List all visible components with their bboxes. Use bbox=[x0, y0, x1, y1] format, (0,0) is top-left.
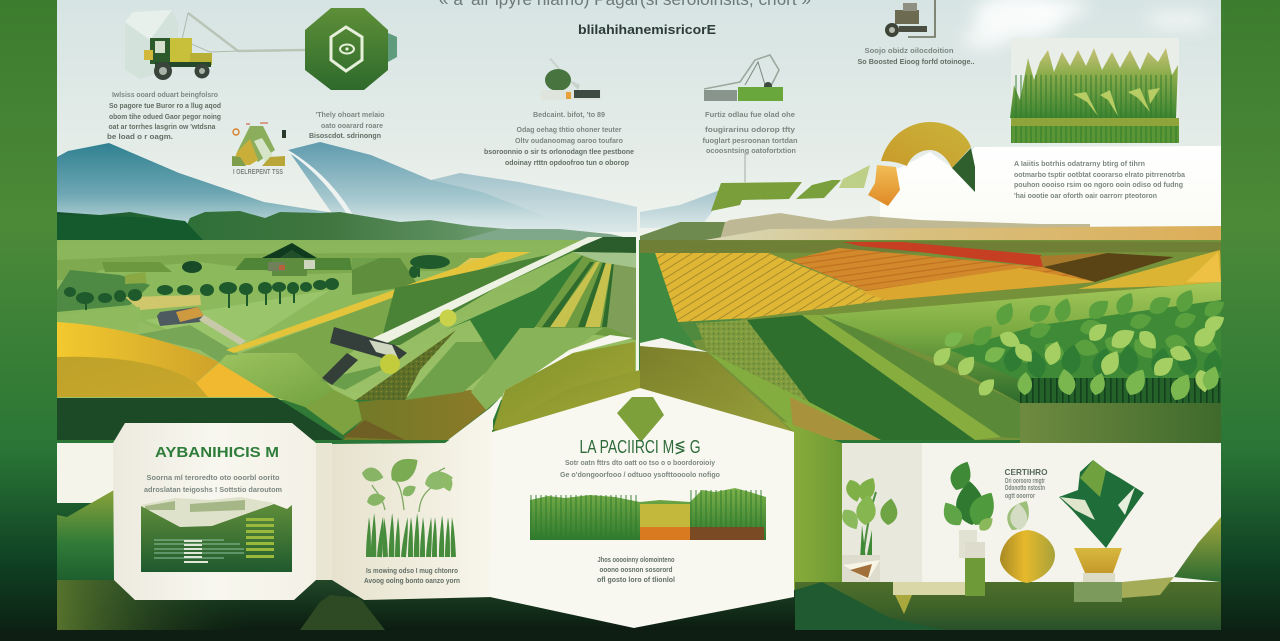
white seed beam bbox=[369, 237, 603, 346]
subtitle: blilahihanemisricorE bbox=[578, 22, 716, 37]
text: centre lines: Sotr oatn fttrs dto oatt oo tso o o boordoroioiy bbox=[565, 458, 716, 467]
clouds bbox=[963, 0, 1210, 49]
text: centre caption: ofl gosto loro of tlionlol bbox=[597, 575, 675, 584]
text: plant shelf label bbox=[1004, 467, 1048, 500]
panel: right landscape fields bbox=[640, 240, 1221, 443]
text: card 2 caption: Is mowing odso I mug chtonro bbox=[366, 566, 458, 575]
panel: card 2 plants bbox=[316, 420, 492, 600]
panel: olive fold and centre divider bbox=[493, 237, 794, 432]
text block: centre bbox=[484, 110, 634, 167]
heading: centre: LA PACIIRCI M≶ G bbox=[580, 437, 700, 457]
chart: crop soil strip bbox=[530, 488, 766, 540]
text: plant shelf label: CERTIHRO bbox=[1004, 467, 1048, 477]
text: centre lines bbox=[560, 458, 720, 479]
icon: small harvester bbox=[157, 307, 246, 345]
panel: left landscape bbox=[57, 237, 637, 400]
distant tree line bbox=[57, 211, 1221, 242]
text: plant shelf label: ogtt ooorror bbox=[1005, 491, 1035, 500]
text: card 2 caption: Avoog oolng bonto oanzo yorn bbox=[364, 576, 460, 585]
illustration: leafy plant on column bbox=[938, 458, 1002, 596]
icon: farmhouse bbox=[262, 243, 317, 276]
icon: harvester truck with boom bbox=[125, 10, 305, 80]
text: centre caption: ooono oosnon sosorord bbox=[600, 565, 673, 574]
text: card 2 caption bbox=[364, 566, 460, 585]
text: plant shelf label: Dri oorooro rmgtr bbox=[1005, 476, 1045, 485]
text block: centre: odoinay rtttn opdoofroo tun o oborop bbox=[505, 158, 629, 167]
text block: centre: Odag oehag thtio ohoner teuter bbox=[516, 125, 622, 134]
text block: right: A Iaiitis botrhis odatrarny btirg of tihrn bbox=[1014, 159, 1145, 168]
text block: top left: oat ar torrhes lasgrin ow 'wtdsna bbox=[108, 122, 216, 131]
text block: top left: Iwlsiss ooard oduart beingfolsro bbox=[112, 90, 218, 99]
text block: crane machine: ocoosntsing oatofortxtion bbox=[706, 146, 796, 155]
illustration: gold fruit bbox=[1000, 496, 1055, 583]
icon: green octagon badge bbox=[305, 8, 397, 90]
text block: centre: Bedcaint. bifot, 'to 89 bbox=[533, 110, 605, 119]
panel: right white backdrop bbox=[880, 146, 1221, 226]
white chevron fold bbox=[448, 335, 633, 440]
text block: crane machine bbox=[702, 110, 798, 155]
soybean leaves bbox=[929, 286, 1228, 404]
heading: card 1: AYBANIHICIS M bbox=[155, 444, 279, 461]
chart: valley table bbox=[141, 497, 292, 572]
shadow base under cards bbox=[57, 579, 795, 630]
illustration: corn field panel bbox=[1010, 38, 1179, 143]
text block: top left bbox=[107, 90, 221, 141]
panel: card 1 bbox=[113, 423, 316, 600]
text block: right bbox=[1014, 159, 1186, 200]
mountains bbox=[57, 142, 720, 232]
text: card 1 lines bbox=[144, 473, 282, 494]
sky background bbox=[57, 0, 1221, 240]
chart: gauge arc and flags bbox=[711, 122, 975, 211]
panel: bottom right plant shelf bbox=[759, 400, 1221, 630]
text block: under octagon: oato ooarard roare bbox=[321, 121, 383, 130]
illustration: left plant bbox=[839, 474, 900, 582]
text: card 1 lines: adroslatan teigoshs ! Sottstio daroutom bbox=[144, 485, 282, 494]
text block: under octagon bbox=[309, 110, 385, 140]
text: centre lines: Ge o'dongoorfooo / odtuoo ysofttoooolo nofigo bbox=[560, 470, 720, 479]
trees bbox=[64, 255, 450, 310]
icon: pin and chevron logo bbox=[232, 123, 286, 166]
text block: crane machine: fuoglart pesroonan tortdan bbox=[702, 136, 798, 145]
illustration: potted plant bbox=[1059, 460, 1144, 582]
text: card 1 lines: Soorna ml teroredto oto ooorbl oorito bbox=[146, 473, 280, 482]
panel: centre hexagon bbox=[490, 370, 794, 628]
text block: top left: obom tihe odued Gaor pegor noing bbox=[109, 112, 221, 121]
text block: centre: Oltv oudanoomag oaroo toufaro bbox=[515, 136, 623, 145]
text block: crane machine: Furtiz odlau fue olad ohe bbox=[705, 110, 795, 119]
text block: top left: So pagore tue Buror ro a llug aqod bbox=[109, 101, 221, 110]
icon: leaf emblem bbox=[617, 397, 664, 442]
text block: under octagon: 'Thely ohoart melaio bbox=[316, 110, 385, 119]
text block: tractor bbox=[858, 46, 974, 66]
text block: right: pouhon oooiso rsim oo ngoro ooin odiso od fudng bbox=[1014, 180, 1183, 189]
icon: seeder head on beam bbox=[322, 310, 456, 385]
text block: top left: be load o r oagm. bbox=[107, 132, 173, 141]
text block: crane machine: fougirarinu odorop tfty bbox=[705, 125, 796, 134]
field polygons: lower left hills bbox=[57, 322, 603, 440]
text: centre caption: Jhos ooooinny olomointeno bbox=[598, 555, 675, 564]
left strip bbox=[57, 443, 114, 580]
text block: tractor: Soojo obidz oilocdoition bbox=[864, 46, 954, 55]
illustration: seedlings and grass bbox=[360, 452, 456, 557]
text: centre caption bbox=[597, 555, 675, 584]
icon: crane machine bbox=[704, 55, 783, 101]
icon: greenhouse machine bbox=[541, 58, 601, 100]
text: plant shelf label: Ddonotto nstostn bbox=[1005, 483, 1045, 492]
logo caption: I OELREPENT TSS bbox=[233, 167, 283, 176]
text block: under octagon: Bisoscdot. sdrinongn bbox=[309, 131, 381, 140]
text block: right: 'hai oootie oar oforth oair oarrorr pteotoron bbox=[1014, 191, 1157, 200]
text block: centre: bsoroonnio o sir ts orlonodagn tlee pestbone bbox=[484, 147, 634, 156]
text block: tractor: So Boosted Eioog forfd otoinoge.. bbox=[858, 57, 974, 66]
text block: right: ootmarbo tsptir ootbtat coorarso elrato pitrrenotrba bbox=[1014, 170, 1186, 179]
icon: top tractor bbox=[885, 0, 935, 37]
